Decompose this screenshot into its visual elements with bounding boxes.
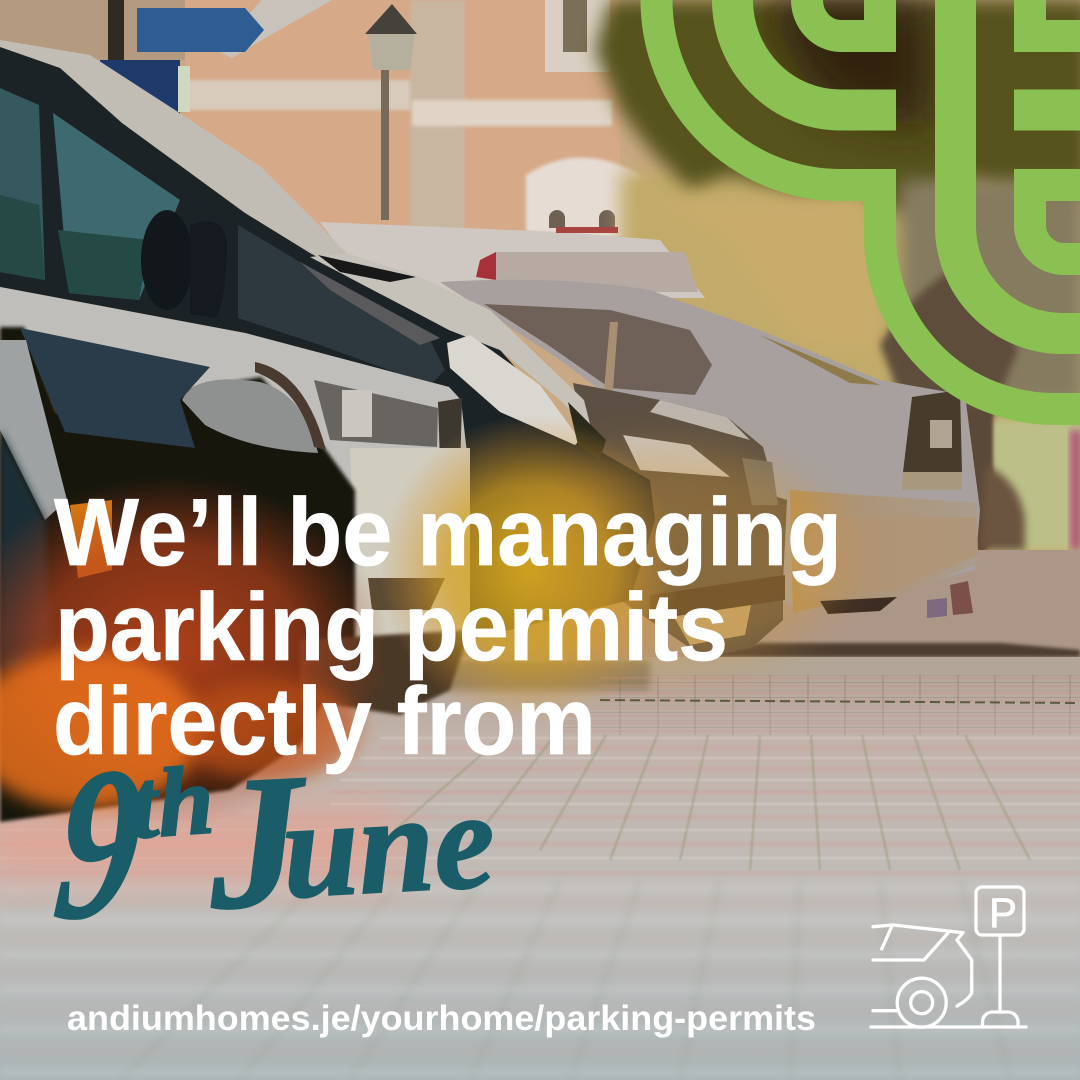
date in teal script: une — [279, 762, 498, 928]
heading: directly from — [53, 668, 596, 775]
building wall — [0, 0, 1080, 560]
road — [0, 550, 1080, 660]
second dark car front — [573, 383, 787, 657]
front-left dark car — [0, 327, 355, 822]
date in teal script: th — [126, 746, 217, 860]
ground shadow — [700, 643, 1080, 657]
tree and right backdrop — [595, 0, 1080, 580]
street sign and lamp — [100, 0, 417, 220]
date in teal script — [48, 720, 498, 965]
brand shape: green concentric lines — [656, 0, 1080, 409]
brick rows — [0, 735, 1080, 873]
heading: parking permits — [55, 574, 728, 681]
heading: We’ll be managing — [54, 479, 842, 586]
silver sedan — [440, 280, 980, 618]
icon: car at parking sign — [871, 887, 1026, 1027]
date in teal script: J — [202, 735, 315, 950]
large dark car: roof — [0, 40, 347, 257]
white car in front — [0, 287, 470, 642]
colour glows — [0, 415, 840, 825]
rear white car — [320, 222, 705, 298]
pavement — [0, 657, 1080, 1080]
large dark car: body — [0, 47, 655, 640]
date in teal script: 9 — [48, 720, 151, 965]
heading — [53, 479, 842, 775]
website address: andiumhomes.je/yourhome/parking-permits — [67, 999, 816, 1038]
tyre shadow — [300, 630, 470, 715]
icon: car at parking sign: P — [989, 889, 1017, 936]
